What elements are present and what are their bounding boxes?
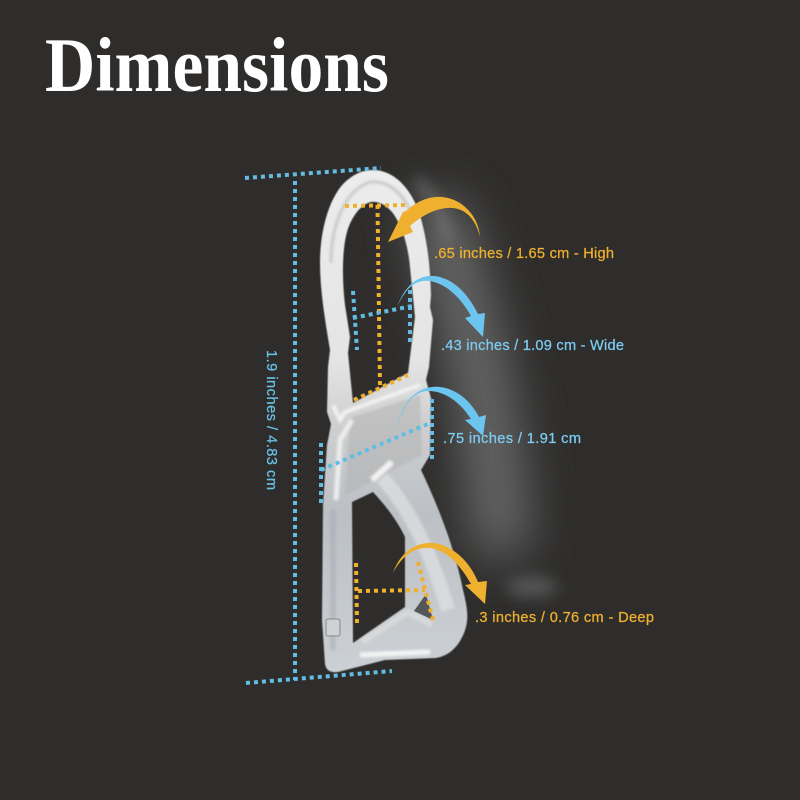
height dimension lines [345,205,408,400]
clip small inner hole [414,594,433,620]
depth dimension lines [356,562,433,623]
depth label: .3 inches / 0.76 cm - Deep [475,610,654,626]
title: Dimensions [45,22,389,108]
clip product illustration [320,170,467,672]
arrow: depth [393,543,487,604]
total height label: 1.9 inches / 4.83 cm [263,350,279,490]
arrow: width [397,276,485,337]
width dimension lines [353,290,412,350]
background glow behind clip [418,182,558,596]
arrow: height [388,197,480,242]
arrow: .75 [397,387,486,436]
clip shading [331,182,448,655]
.75 label: .75 inches / 1.91 cm [443,431,581,447]
clip small tab [326,619,340,636]
.75 dimension lines [321,399,432,503]
total height dimension [245,168,392,683]
height label: .65 inches / 1.65 cm - High [434,246,614,262]
width label: .43 inches / 1.09 cm - Wide [441,338,624,354]
